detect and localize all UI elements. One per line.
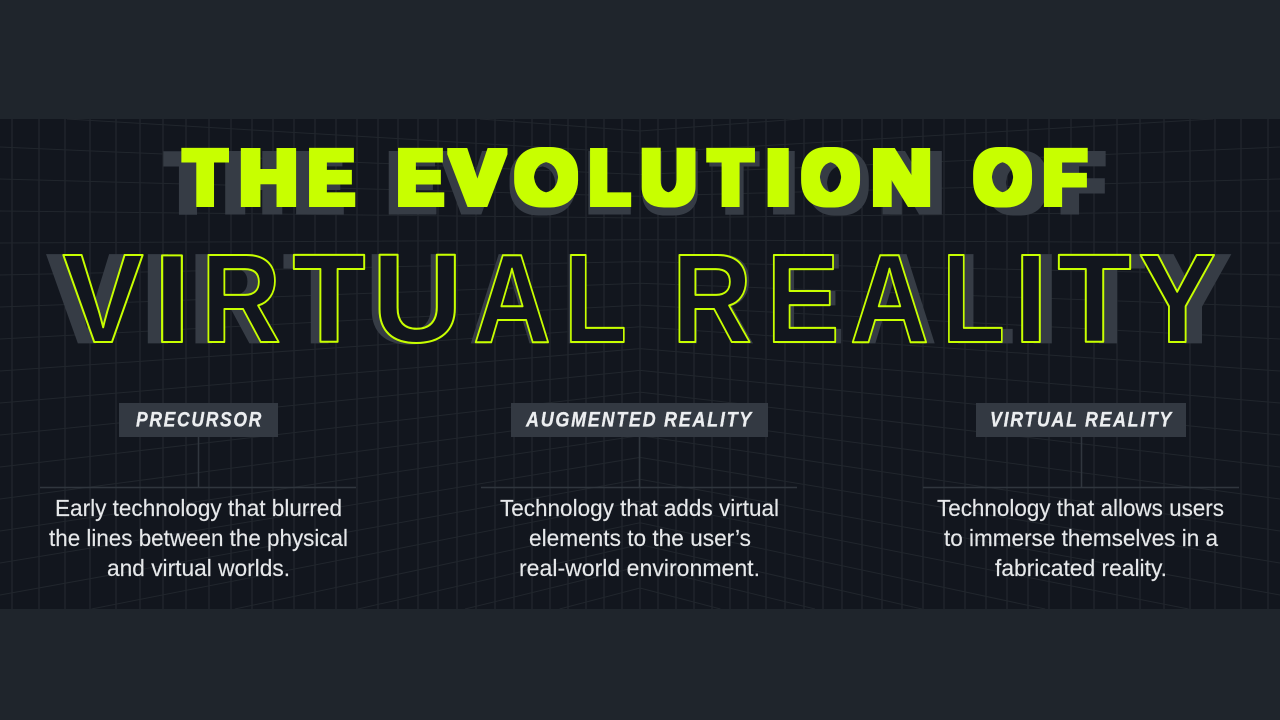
text: virtual reality description: [937, 495, 1224, 581]
title shadow: the evolution of: F: [1060, 137, 1104, 230]
title shadow: virtual reality: A: [468, 226, 548, 371]
title: virtual reality outlined: T: [1058, 228, 1132, 369]
title: the evolution of: U: [641, 135, 696, 221]
panel: virtual reality: [923, 403, 1239, 581]
text: virtual reality description: fabricated reality.: [995, 555, 1167, 581]
title shadow: the evolution of: E: [295, 137, 343, 230]
text: precursor description: [49, 495, 348, 581]
title: virtual reality outlined: L: [564, 228, 627, 369]
panel: precursor: [40, 403, 356, 581]
text: virtual reality description: Technology that allows users: [937, 495, 1224, 521]
title shadow: the evolution of: U: [641, 137, 699, 230]
title: virtual reality outlined: I: [153, 228, 191, 369]
title shadow: the evolution of: H: [224, 137, 284, 230]
title shadow: the evolution of: I: [771, 137, 797, 230]
title shadow: the evolution of: [167, 137, 1104, 230]
title shadow: the evolution of: T: [712, 137, 756, 230]
title shadow: virtual reality: I: [1025, 226, 1060, 371]
title shadow: virtual reality: V: [45, 226, 129, 371]
title: the evolution of: N: [871, 135, 932, 221]
text: augmented reality description: elements to the user’s: [529, 525, 751, 551]
title: the evolution of: E: [308, 135, 354, 221]
title: virtual reality outlined: U: [372, 228, 462, 369]
title: virtual reality outlined: R: [201, 228, 281, 369]
text: precursor description: Early technology that blurred: [55, 495, 342, 521]
title: virtual reality outlined: E: [766, 228, 840, 369]
title shadow: the evolution of: E: [388, 137, 435, 230]
title: virtual reality outlined: V: [62, 228, 144, 369]
title shadow: the evolution of: T: [167, 137, 209, 230]
title: the evolution of: I: [766, 135, 791, 221]
text: augmented reality description: Technology that adds virtual: [500, 495, 779, 521]
label: augmented reality: AUGMENTED REALITY: [525, 408, 753, 432]
title: the evolution of: L: [590, 135, 629, 221]
title: the evolution of: [185, 135, 1086, 221]
panel: augmented reality: [481, 403, 797, 581]
title shadow: virtual reality: T: [282, 226, 357, 371]
title: virtual reality outlined: Y: [1138, 228, 1216, 369]
label: virtual reality: VIRTUAL REALITY: [990, 408, 1173, 432]
title: virtual reality outlined: R: [672, 228, 752, 369]
text: augmented reality description: [500, 495, 779, 581]
panel: dark grid background: [0, 119, 1280, 609]
text: precursor description: and virtual worlds.: [107, 555, 290, 581]
title shadow: virtual reality: R: [188, 226, 270, 371]
title: virtual reality outlined: A: [473, 228, 551, 369]
title: the evolution of: T: [185, 135, 226, 221]
title: virtual reality outlined: [62, 228, 1216, 369]
title: the evolution of: V: [451, 135, 504, 221]
title: virtual reality outlined: A: [850, 228, 929, 369]
text: virtual reality description: to immerse themselves in a: [944, 525, 1219, 551]
title shadow: the evolution of: O: [988, 137, 1047, 230]
label: augmented reality: [511, 403, 768, 437]
title shadow: virtual reality: I: [138, 226, 178, 371]
label: precursor: [119, 403, 278, 437]
title shadow: virtual reality: Y: [1153, 226, 1233, 371]
title shadow: the evolution of: O: [510, 137, 575, 230]
title shadow: virtual reality: A: [856, 226, 938, 371]
title: the evolution of: E: [398, 135, 443, 221]
title: the evolution of: O: [974, 135, 1031, 221]
title: the evolution of: H: [240, 135, 298, 221]
label: virtual reality: [976, 403, 1186, 437]
title shadow: virtual reality: E: [770, 226, 845, 371]
title: the evolution of: O: [802, 135, 859, 221]
title: the evolution of: O: [515, 135, 578, 221]
title: virtual reality outlined: T: [292, 228, 366, 369]
title: virtual reality outlined: L: [942, 228, 1005, 369]
title shadow: virtual reality: U: [364, 226, 457, 371]
title shadow: the evolution of: V: [443, 137, 499, 230]
title shadow: virtual reality: L: [562, 226, 627, 371]
title: virtual reality outlined: I: [1014, 228, 1048, 369]
title shadow: virtual reality: T: [1070, 226, 1146, 371]
title shadow: virtual reality: [45, 226, 1233, 371]
title: the evolution of: T: [710, 135, 752, 221]
text: precursor description: the lines between the physical: [49, 525, 348, 551]
title shadow: the evolution of: O: [809, 137, 868, 230]
title shadow: the evolution of: N: [881, 137, 944, 230]
title: the evolution of: F: [1043, 135, 1086, 221]
title shadow: virtual reality: R: [673, 226, 755, 371]
title shadow: the evolution of: L: [588, 137, 629, 230]
label: precursor: PRECURSOR: [136, 408, 263, 432]
text: augmented reality description: real-world environment.: [519, 555, 760, 581]
title shadow: virtual reality: L: [951, 226, 1016, 371]
